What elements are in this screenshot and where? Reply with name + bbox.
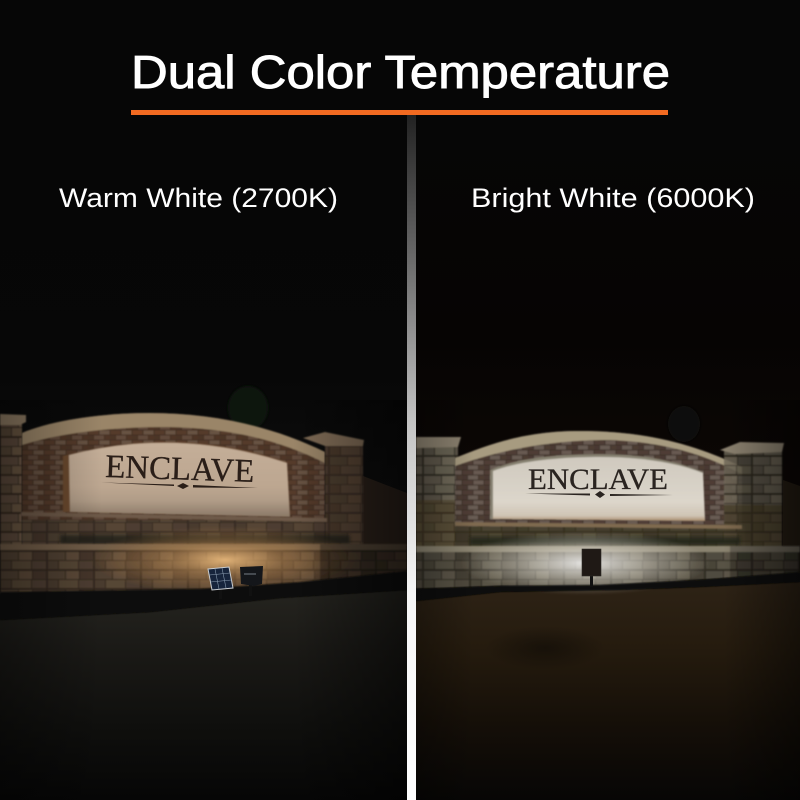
flower bed bright xyxy=(416,572,800,601)
sign panel bright xyxy=(490,454,705,521)
icon: flood light bright xyxy=(582,549,601,587)
arched brick wall bright xyxy=(455,431,745,548)
vignette bright xyxy=(416,436,800,736)
right pillar bright xyxy=(720,442,784,548)
sign lettering bright: ENCLAVE xyxy=(528,463,668,496)
night sky bright xyxy=(416,120,800,550)
lawn shadow patch xyxy=(520,639,569,656)
icon: flood light xyxy=(240,566,263,586)
sign ornament warm xyxy=(101,482,258,489)
panel: bright white photo xyxy=(416,406,800,762)
low stone wall bright xyxy=(416,531,800,595)
icon: solar panel xyxy=(207,566,234,590)
ledge warm xyxy=(21,512,327,522)
panel: warm white photo xyxy=(0,385,407,734)
side wall bright xyxy=(783,480,800,546)
lawn bright xyxy=(416,582,800,762)
sign panel warm xyxy=(63,442,290,517)
sign ornament bright xyxy=(525,491,673,498)
vignette warm xyxy=(0,413,407,712)
hedge bright xyxy=(470,537,740,545)
right pillar warm xyxy=(303,432,364,546)
left pillar warm xyxy=(0,414,26,546)
label: bright white: Bright White (6000K) xyxy=(471,183,755,213)
title underline xyxy=(131,110,668,115)
tree silhouette bright xyxy=(668,406,700,442)
tree silhouette warm xyxy=(230,388,266,426)
low stone wall warm xyxy=(0,526,407,594)
left pillar bright xyxy=(416,437,461,548)
lawn warm xyxy=(0,590,407,734)
ledge bright xyxy=(455,522,742,529)
title: Dual Color Temperature xyxy=(131,46,670,98)
night sky warm xyxy=(0,120,407,550)
label: warm white: Warm White (2700K) xyxy=(59,183,338,213)
sign lettering warm: ENCLAVE xyxy=(105,449,255,490)
hedge warm xyxy=(60,535,350,544)
flower bed warm xyxy=(0,571,407,620)
side wall warm xyxy=(363,476,407,546)
arched brick wall warm xyxy=(22,413,325,546)
divider xyxy=(407,115,416,800)
